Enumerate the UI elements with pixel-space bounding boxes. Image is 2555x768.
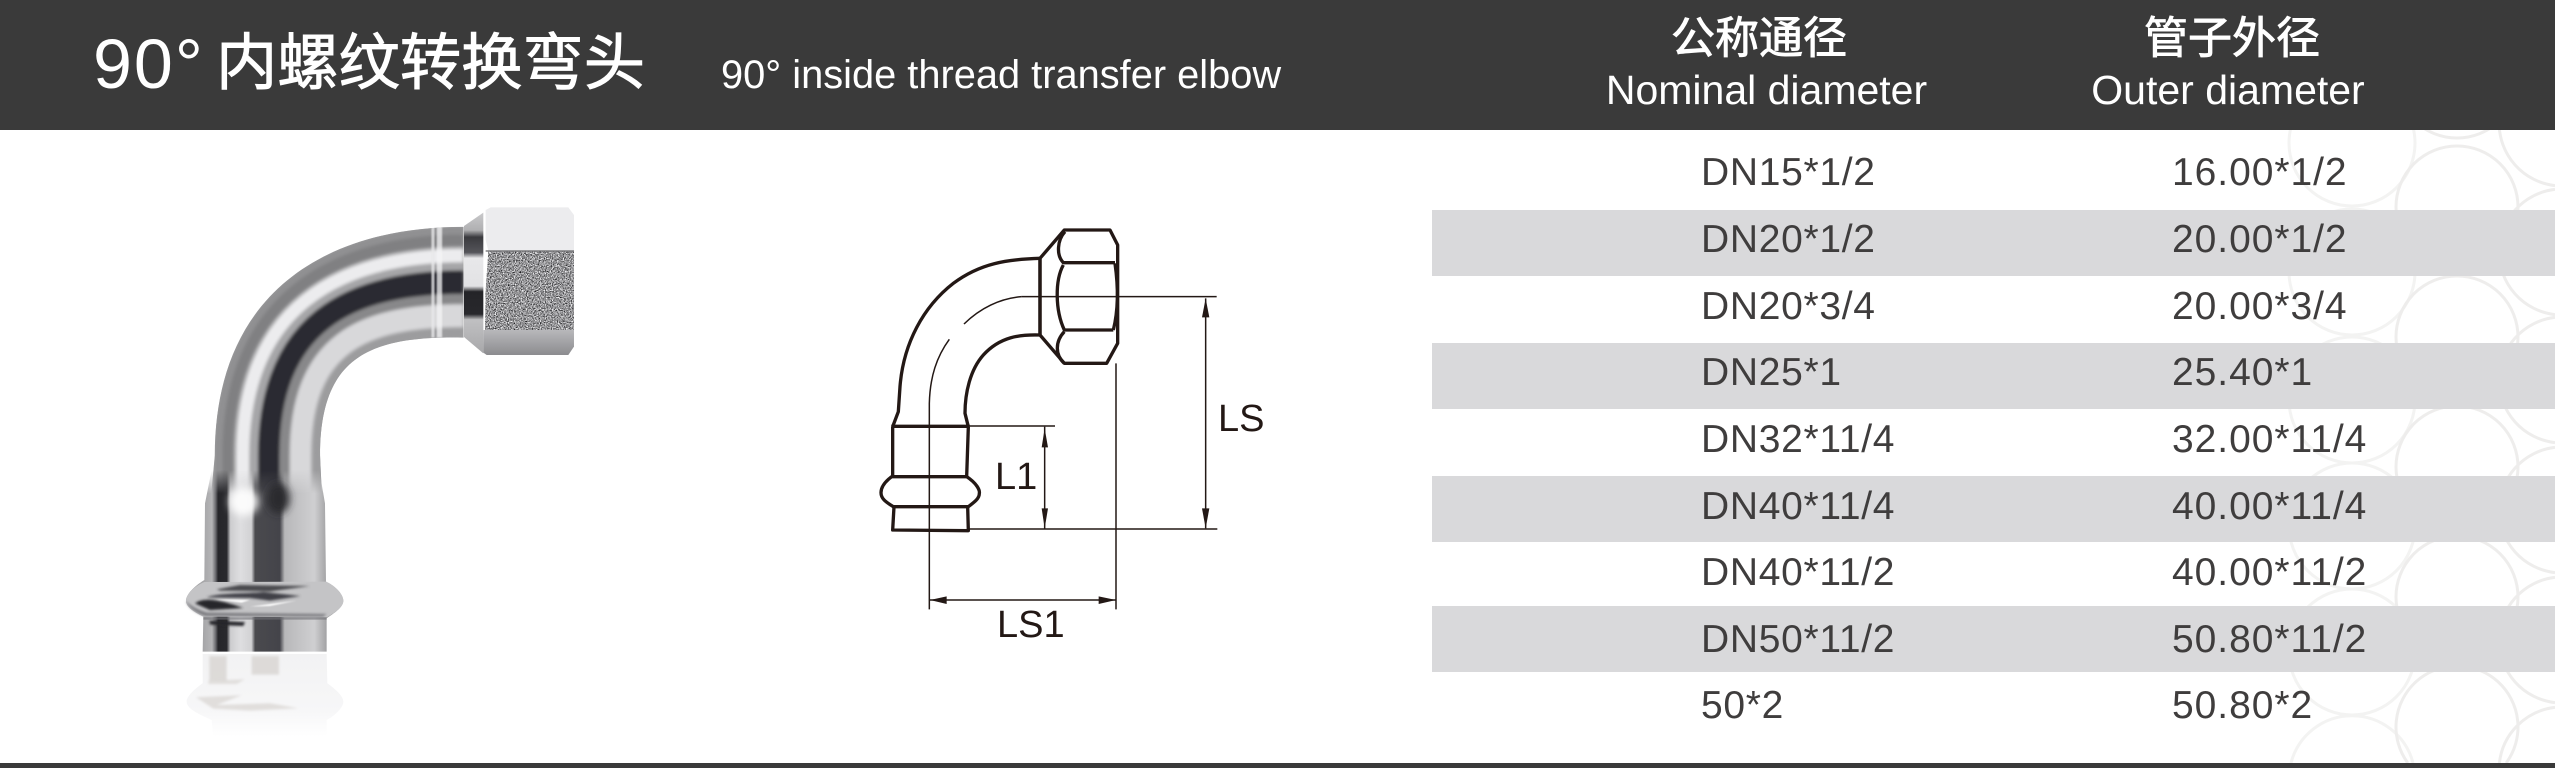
row DN20 3/4: 20.00*3/4 bbox=[2172, 285, 2348, 328]
drawing: dimension arrowheads bbox=[930, 298, 1209, 604]
striped row backgrounds bbox=[1432, 210, 2555, 672]
row DN50 bbox=[1701, 618, 2367, 661]
elbow reflection bbox=[187, 654, 343, 737]
column heading: outer diameter bbox=[2091, 14, 2365, 113]
row DN20 1/2: 20.00*1/2 bbox=[2172, 218, 2348, 261]
row 50*2: 50.80*2 bbox=[2172, 684, 2313, 727]
row DN50: DN50*11/2 bbox=[1701, 618, 1895, 661]
bottom bar bbox=[0, 763, 2555, 768]
row DN20 1/2 bbox=[1701, 218, 2348, 261]
header bar bbox=[0, 0, 2555, 130]
row DN40 11/2: DN40*11/2 bbox=[1701, 551, 1895, 594]
row DN50: 50.80*11/2 bbox=[2172, 618, 2367, 661]
column heading: outer diameter: 管子外径 bbox=[2144, 14, 2320, 63]
row 50*2: 50*2 bbox=[1701, 684, 1784, 727]
column heading: nominal diameter: Nominal diameter bbox=[1606, 67, 1927, 113]
background pattern: interlocking rings bbox=[2289, 16, 2555, 763]
dimension label L1: L1 bbox=[995, 456, 1037, 498]
elbow pipe body bbox=[211, 227, 464, 496]
photo: stainless steel elbow bbox=[186, 207, 577, 737]
column heading: nominal diameter bbox=[1606, 14, 1927, 113]
row DN40 11/2 bbox=[1701, 551, 2367, 594]
row DN20 3/4: DN20*3/4 bbox=[1701, 285, 1876, 328]
title: degree value: 90° bbox=[93, 25, 205, 103]
row DN40 11/4: DN40*11/4 bbox=[1701, 485, 1895, 528]
row DN20 3/4 bbox=[1701, 285, 2348, 328]
title: English product name: 90° inside thread transfer elbow bbox=[721, 53, 1281, 97]
row DN32 bbox=[1701, 418, 2367, 461]
row DN15: 16.00*1/2 bbox=[2172, 151, 2348, 194]
dimension label LS1: LS1 bbox=[997, 604, 1065, 646]
row DN25 bbox=[1701, 351, 2313, 394]
title: Chinese product name: 内螺纹转换弯头 bbox=[216, 29, 645, 97]
row DN40 11/2: 40.00*11/2 bbox=[2172, 551, 2367, 594]
drawing: elbow outline bbox=[881, 230, 1118, 531]
elbow threaded nut end bbox=[464, 207, 577, 355]
row DN25: 25.40*1 bbox=[2172, 351, 2313, 394]
row DN32: 32.00*11/4 bbox=[2172, 418, 2367, 461]
row DN15 bbox=[1701, 151, 2348, 194]
row DN25: DN25*1 bbox=[1701, 351, 1842, 394]
row DN32: DN32*11/4 bbox=[1701, 418, 1895, 461]
table: sizes bbox=[1432, 151, 2555, 727]
technical drawing: elbow with dimensions bbox=[881, 230, 1217, 609]
dimension label LS: LS bbox=[1218, 398, 1264, 440]
row DN20 1/2: DN20*1/2 bbox=[1701, 218, 1876, 261]
row 50*2 bbox=[1701, 684, 2313, 727]
column heading: outer diameter: Outer diameter bbox=[2091, 67, 2365, 113]
row DN15: DN15*1/2 bbox=[1701, 151, 1876, 194]
column heading: nominal diameter: 公称通径 bbox=[1671, 14, 1847, 63]
drawing: centre line and dimension lines bbox=[929, 297, 1217, 609]
row DN40 11/4 bbox=[1701, 485, 2367, 528]
elbow press socket and collar bbox=[186, 470, 343, 652]
row DN40 11/4: 40.00*11/4 bbox=[2172, 485, 2367, 528]
